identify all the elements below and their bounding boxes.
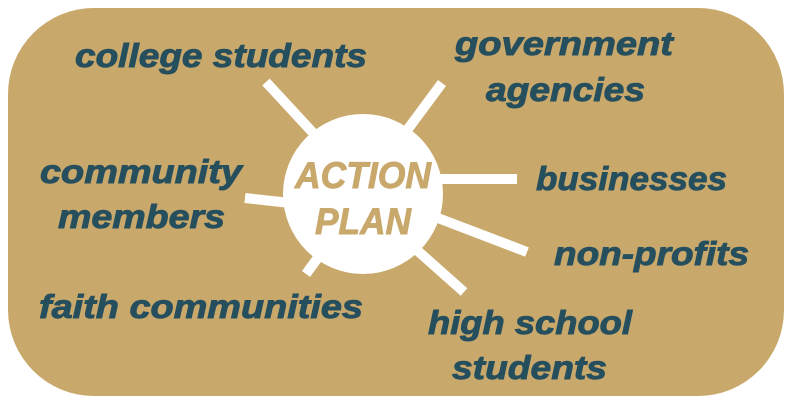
spokes xyxy=(245,82,527,292)
label: community members: members xyxy=(58,198,225,235)
label: government agencies xyxy=(454,25,675,108)
label: businesses: businesses xyxy=(536,160,727,197)
label: government agencies: agencies xyxy=(486,71,645,108)
hub title: ACTION xyxy=(294,155,432,196)
hub title xyxy=(294,155,432,242)
label: high school students: high school xyxy=(428,304,633,341)
label: non-profits: non-profits xyxy=(554,235,749,272)
label: faith communities: faith communities xyxy=(39,288,363,325)
hub circle xyxy=(283,114,443,274)
label: community members: community xyxy=(40,153,244,190)
label: government agencies: government xyxy=(454,25,675,62)
label: high school students: students xyxy=(452,349,607,386)
label: college students: college students xyxy=(75,37,367,74)
label: high school students xyxy=(428,304,633,386)
label: community members xyxy=(40,153,244,235)
hub title: PLAN xyxy=(315,201,412,242)
